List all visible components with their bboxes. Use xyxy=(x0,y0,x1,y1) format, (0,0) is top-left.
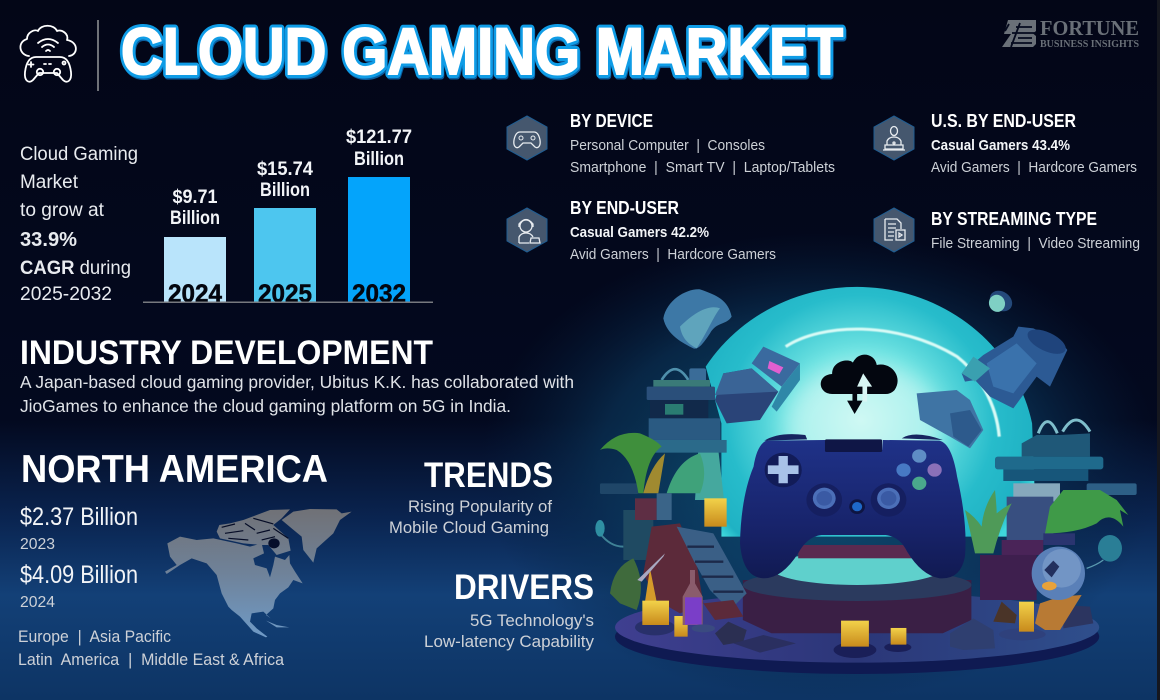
header divider xyxy=(97,20,99,91)
balloon xyxy=(1087,535,1122,568)
floating ring xyxy=(986,286,1016,316)
segment: U.S. by end-user: Avid Gamers | Hardcore Gamers xyxy=(931,159,1137,176)
platform disc xyxy=(615,592,1099,674)
North America block: NORTH AMERICA xyxy=(21,448,328,491)
bar chart xyxy=(143,127,433,308)
illustration: game controller scene xyxy=(595,286,1137,674)
North America block: 2023 xyxy=(20,536,55,553)
bar 2025: Billion xyxy=(260,180,310,201)
rocks and tablet xyxy=(715,622,796,653)
left tower, helmet and floating cube xyxy=(600,289,800,500)
bar 2032: Billion xyxy=(354,149,404,170)
pedestal xyxy=(743,545,971,633)
CAGR text block: to grow at xyxy=(20,200,105,221)
segment: by device: Personal Computer | Consoles xyxy=(570,137,765,154)
stairs and bricks xyxy=(595,493,747,620)
CAGR text block xyxy=(20,144,138,305)
North America block: $4.09 Billion xyxy=(20,561,138,589)
CAGR text block: 33.9% xyxy=(20,229,77,251)
bar 2025: $15.74 xyxy=(257,159,313,180)
right blocks, plants, sphere and balloon xyxy=(950,490,1128,650)
stacked blocks xyxy=(980,497,1075,600)
trends xyxy=(389,456,553,537)
segment: U.S. by end-user xyxy=(874,111,1137,176)
logo: Fortune Business Insights: FORTUNE xyxy=(1040,16,1139,40)
icon: cloud gaming controller xyxy=(20,26,76,82)
game controller xyxy=(740,434,966,578)
North America block: 2024 xyxy=(20,594,55,611)
North America block xyxy=(18,448,328,669)
segment: U.S. by end-user: Casual Gamers 43.4% xyxy=(931,137,1070,154)
left leaf plant xyxy=(610,558,641,610)
drivers: Low-latency Capability xyxy=(424,632,594,651)
trends: Rising Popularity of xyxy=(408,497,552,516)
logo: Fortune Business Insights xyxy=(1002,16,1139,50)
title: CLOUD GAMING MARKET xyxy=(122,16,844,90)
bar 2024 xyxy=(164,187,226,308)
CAGR text block: Market xyxy=(20,172,79,193)
bar 2024: $9.71 xyxy=(172,187,218,208)
crystal sphere xyxy=(1032,547,1085,600)
CAGR text block: Cloud Gaming xyxy=(20,144,138,165)
icon: hexagon user at laptop xyxy=(874,116,914,160)
candle on dish xyxy=(999,602,1046,640)
left plants xyxy=(600,433,704,493)
floating helmet xyxy=(663,289,732,349)
bar 2032: $121.77 xyxy=(346,127,412,148)
center candles and rocks xyxy=(834,621,911,658)
glowing dome xyxy=(706,287,1036,537)
tower xyxy=(600,368,727,500)
map: North America xyxy=(165,509,352,637)
bar 2024: Billion xyxy=(170,208,220,229)
North America block: Europe | Asia Pacific xyxy=(18,627,171,646)
logo: Fortune Business Insights: BUSINESS INSIGHTS xyxy=(1040,39,1139,50)
trends: TRENDS xyxy=(424,456,553,495)
industry development: JioGames to enhance the cloud gaming platform on 5G in India. xyxy=(20,396,511,416)
title: CLOUD GAMING MARKET xyxy=(121,14,843,88)
icon: cloud with arrows xyxy=(821,355,898,414)
icon: hexagon controller xyxy=(507,116,547,160)
segment: by end-user xyxy=(507,198,776,263)
bar 2025 xyxy=(254,159,316,308)
segment: by streaming type: File Streaming | Video Streaming xyxy=(931,235,1140,252)
segment: by streaming type xyxy=(874,208,1140,252)
industry development: A Japan-based cloud gaming provider, Ubitus K.K. has collaborated with xyxy=(20,372,574,392)
segment: by end-user: BY END-USER xyxy=(570,198,679,218)
floating cube xyxy=(715,347,800,423)
left bricks, stairs, candles and bottle xyxy=(595,493,796,653)
segment: by end-user: Avid Gamers | Hardcore Gamers xyxy=(570,246,776,263)
candles and bottle xyxy=(635,498,727,637)
industry development: INDUSTRY DEVELOPMENT xyxy=(20,334,433,372)
right tower and floating machine xyxy=(917,286,1137,502)
segment: by device xyxy=(507,111,835,176)
title: CLOUD GAMING MARKET xyxy=(121,14,843,88)
segment: by end-user: Casual Gamers 42.2% xyxy=(570,224,709,241)
bar 2032: 2032 xyxy=(352,280,406,308)
CAGR text block: CAGR during xyxy=(20,258,131,279)
trends: Mobile Cloud Gaming xyxy=(389,518,549,537)
North America block: Latin America | Middle East & Africa xyxy=(18,650,285,669)
right plants xyxy=(965,490,1128,553)
icon: hexagon file video xyxy=(874,208,914,252)
drivers xyxy=(424,568,594,651)
segment: U.S. by end-user: U.S. BY END-USER xyxy=(931,111,1076,131)
segment: by device: Smartphone | Smart TV | Laptop/Tablets xyxy=(570,159,835,176)
drivers: DRIVERS xyxy=(454,568,594,607)
drivers: 5G Technology's xyxy=(470,611,594,630)
icon: hexagon gamer xyxy=(507,208,547,252)
North America block: $2.37 Billion xyxy=(20,503,138,531)
industry development xyxy=(20,334,574,416)
floating machine xyxy=(917,324,1069,448)
bar 2025: 2025 xyxy=(258,280,312,308)
CAGR text block: 2025-2032 xyxy=(20,284,112,305)
right tower xyxy=(995,420,1137,502)
segment: by device: BY DEVICE xyxy=(570,111,653,131)
bar 2032 xyxy=(346,127,412,308)
segment: by streaming type: BY STREAMING TYPE xyxy=(931,209,1097,229)
brown figure and rocks xyxy=(950,602,1093,650)
bar 2024: 2024 xyxy=(168,280,222,308)
orange cloth xyxy=(1035,595,1082,630)
